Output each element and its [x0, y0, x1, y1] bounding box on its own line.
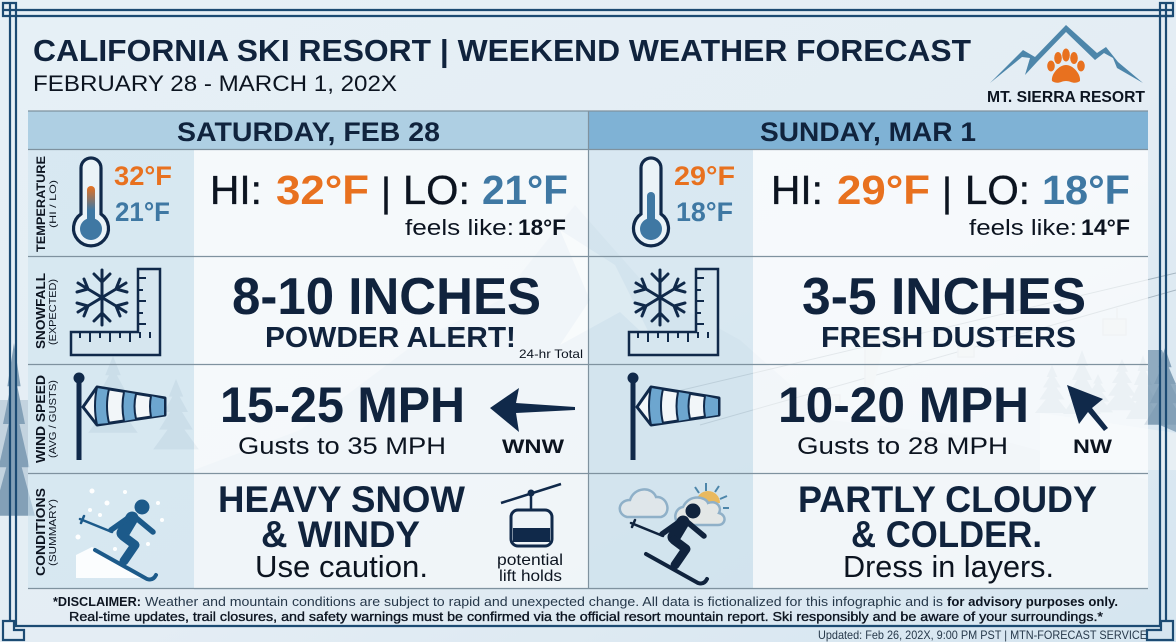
Saturday feels like: 18°F: [518, 215, 566, 240]
disclaimer: Real-time updates, trail closures, and safety warnings must be confirmed via the official resort mountain report. Ski responsibly and be aware of your surroundings.*: [69, 609, 1103, 624]
heading: Saturday: SATURDAY, FEB 28: [177, 117, 440, 147]
Sunday conditions: & COLDER.: [851, 514, 1042, 555]
Saturday wind: [220, 377, 465, 460]
Saturday snowfall: 24-hr Total: [519, 347, 583, 361]
row labels: (EXPECTED): [48, 279, 59, 345]
Sunday wind: 10-20 MPH: [778, 377, 1029, 433]
table panel backgrounds: [28, 111, 1148, 588]
Sunday small temps: 18°F: [676, 197, 733, 227]
Saturday hi / lo: [210, 167, 568, 215]
row labels: CONDITIONS: [34, 488, 48, 576]
icon: skier in heavy snow: [76, 488, 164, 580]
icon: thermometer Sunday: [634, 158, 668, 246]
row labels: SNOWFALL: [34, 273, 48, 349]
Saturday snowfall: [232, 268, 583, 361]
disclaimer: for advisory purposes only.: [947, 594, 1118, 609]
Saturday hi / lo: LO:: [403, 167, 470, 213]
Sunday conditions: [798, 479, 1097, 584]
Sunday small temps: [674, 161, 735, 227]
Saturday hi / lo: 21°F: [482, 167, 568, 213]
icon: snow ruler Saturday: [71, 269, 160, 355]
Sunday snowfall: [802, 268, 1086, 354]
potential lift holds note: potential: [497, 552, 563, 569]
Saturday small temps: 21°F: [115, 197, 170, 227]
Sunday feels like: [969, 215, 1130, 240]
Saturday conditions: [218, 479, 465, 584]
row labels: (AVG / GUSTS): [48, 380, 59, 458]
Sunday small temps: 29°F: [674, 161, 735, 191]
logo: Mt. Sierra Resort: [987, 25, 1146, 106]
disclaimer: *DISCLAIMER:: [53, 594, 141, 609]
Sunday conditions: PARTLY CLOUDY: [798, 479, 1097, 520]
row labels: (HI / LO): [48, 180, 59, 228]
row labels: TEMPERATURE: [36, 156, 48, 252]
icon: gondola: [501, 484, 561, 546]
Saturday conditions: & WINDY: [261, 514, 420, 555]
Sunday wind: [778, 377, 1029, 460]
Sunday hi / lo: LO:: [965, 167, 1030, 213]
Saturday hi / lo: 32°F: [276, 167, 369, 213]
Saturday feels like: [405, 215, 566, 240]
subtitle: dates: FEBRUARY 28 - MARCH 1, 202X: [33, 71, 397, 96]
Saturday hi / lo: HI:: [210, 167, 262, 213]
disclaimer: [53, 594, 1118, 624]
Sunday hi / lo: 29°F: [837, 167, 930, 213]
arrow: NW: [1067, 385, 1112, 458]
icon: thermometer Saturday: [74, 158, 108, 246]
Sunday hi / lo: [771, 167, 1130, 215]
heading: Sunday: SUNDAY, MAR 1: [760, 117, 976, 147]
Saturday wind: Gusts to 35 MPH: [238, 433, 446, 460]
Sunday hi / lo: |: [942, 169, 952, 215]
Saturday hi / lo: |: [381, 169, 391, 215]
logo: Mt. Sierra Resort: MT. SIERRA RESORT: [987, 89, 1146, 106]
icon: windsock Sunday: [628, 372, 719, 460]
Saturday conditions: Use caution.: [255, 549, 428, 584]
Sunday feels like: 14°F: [1081, 215, 1130, 240]
potential lift holds note: [497, 552, 563, 585]
Saturday conditions: HEAVY SNOW: [218, 479, 465, 520]
arrow: WNW: WNW: [502, 437, 564, 458]
Sunday conditions: Dress in layers.: [843, 549, 1054, 584]
Saturday snowfall: 8-10 INCHES: [232, 268, 541, 326]
Saturday wind: 15-25 MPH: [220, 377, 465, 433]
Sunday snowfall: FRESH DUSTERS: [821, 322, 1076, 354]
Sunday hi / lo: HI:: [771, 167, 823, 213]
Sunday hi / lo: 18°F: [1042, 167, 1130, 213]
title: CALIFORNIA SKI RESORT | WEEKEND WEATHER FORECAST: [33, 33, 971, 68]
Saturday snowfall: POWDER ALERT!: [265, 322, 516, 354]
icon: clouds and sun: [620, 483, 729, 525]
row labels: [34, 156, 59, 576]
potential lift holds note: lift holds: [499, 568, 562, 585]
Saturday feels like: feels like:: [405, 215, 514, 240]
icon: skier Sunday: [631, 504, 707, 584]
footer: updated: Updated: Feb 26, 202X, 9:00 PM PST | MTN-FORECAST SERVICE: [818, 628, 1147, 642]
arrow: NW: NW: [1073, 437, 1112, 458]
row labels: (SUMMARY): [48, 499, 59, 566]
disclaimer: Weather and mountain conditions are subject to rapid and unexpected change. All data is fictionalized for this infographic and is: [145, 594, 944, 609]
row labels: WIND SPEED: [34, 375, 48, 463]
Saturday small temps: [114, 161, 172, 227]
icon: snow ruler Sunday: [629, 269, 718, 355]
Sunday feels like: feels like:: [969, 215, 1077, 240]
icon: windsock Saturday: [74, 372, 165, 460]
arrow: WNW: [490, 388, 575, 458]
Saturday small temps: 32°F: [114, 161, 172, 191]
Sunday wind: Gusts to 28 MPH: [797, 433, 1008, 460]
Sunday snowfall: 3-5 INCHES: [802, 268, 1086, 326]
